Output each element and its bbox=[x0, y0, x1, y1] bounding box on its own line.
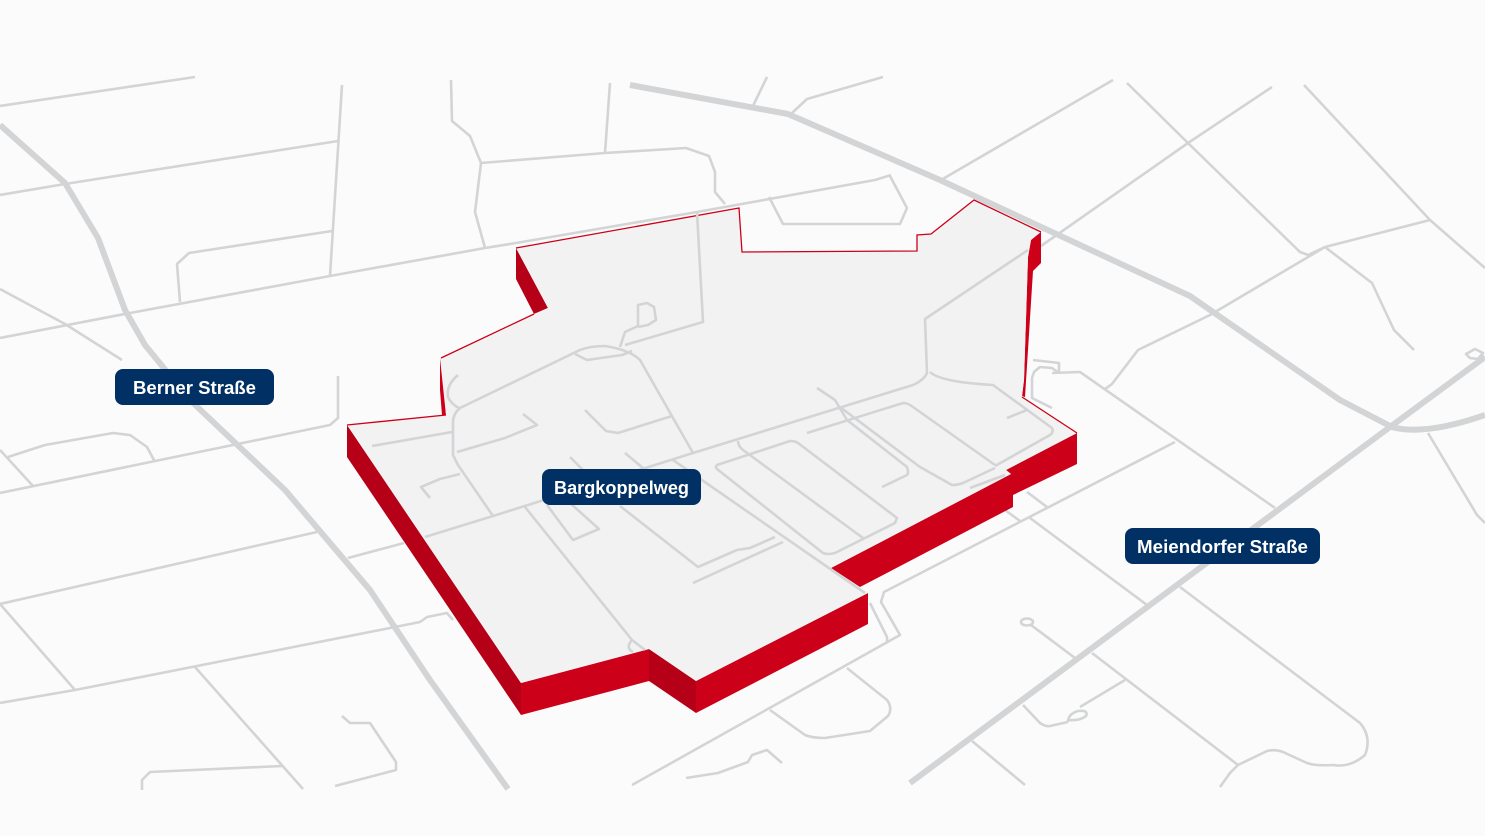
wall: north-east sliver bbox=[1022, 231, 1041, 397]
label: Berner Straße bbox=[115, 369, 274, 405]
wall: south notch bbox=[649, 649, 696, 713]
label: Berner Straße: Berner Straße bbox=[133, 377, 256, 398]
wall: east recess bbox=[831, 433, 1077, 587]
plot: extruded red side walls bbox=[347, 231, 1077, 715]
label: Bargkoppelweg: Bargkoppelweg bbox=[554, 477, 689, 498]
plot: top surface bbox=[347, 200, 1077, 683]
streets inside the plot bbox=[372, 212, 1053, 652]
wall: west notch bbox=[440, 358, 446, 415]
wall: west side bbox=[347, 425, 521, 715]
plot: red outline on north edges bbox=[347, 200, 1077, 433]
wall: north-west notch bbox=[516, 248, 548, 314]
wall: south-east side bbox=[696, 593, 868, 713]
wall: south side bbox=[521, 649, 649, 715]
label: Meiendorfer Straße bbox=[1125, 528, 1320, 564]
label: Bargkoppelweg bbox=[542, 469, 701, 505]
label: Meiendorfer Straße: Meiendorfer Straße bbox=[1137, 536, 1308, 557]
